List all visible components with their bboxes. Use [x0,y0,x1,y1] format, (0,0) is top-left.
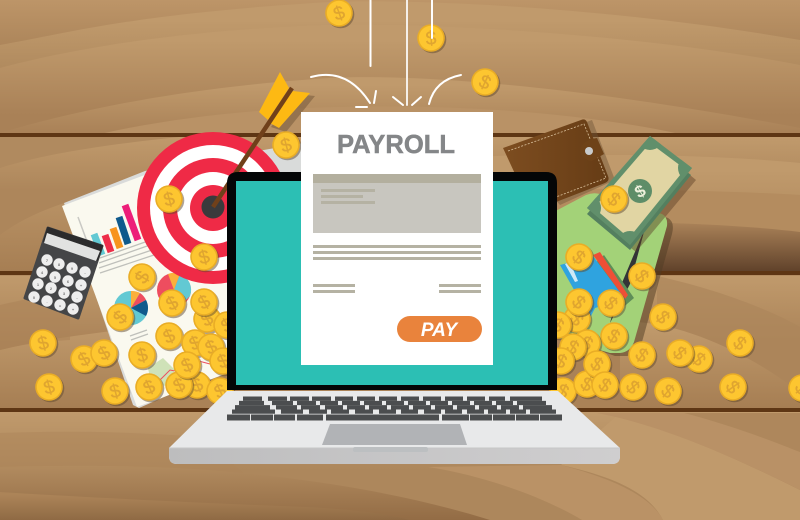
laptop base [169,391,620,464]
coin pile: right: $ [721,377,744,398]
pay button: PAY [421,320,459,341]
coin pile: left: $ [211,380,230,404]
calculator keys: - [84,270,86,275]
coin pile: right: $ [548,314,568,338]
coins on target: $ [161,188,177,211]
calculator keys: = [59,303,62,308]
coin pile: left: $ [218,314,238,338]
front notch [353,447,428,452]
coin pile: left: $ [107,380,123,403]
coin pile: left: $ [188,374,207,398]
coin pile: right: $ [668,343,691,365]
coin pile: left: $ [170,374,189,398]
calculator keys: - [76,295,78,300]
calculator keys: + [72,307,75,312]
coin pile: right: $ [553,380,572,404]
pay button [397,316,482,342]
calculator keys: 3 [63,291,66,296]
screen [236,181,548,385]
line chart [148,358,210,386]
heading: PAYROLL [337,129,455,159]
calculator keys: + [80,283,83,288]
coin pile: right: $ [568,246,589,269]
coin pile: right: $ [594,374,615,398]
calculator keys: 0 [33,295,36,300]
coin pile: right [544,185,800,406]
green pouch [548,193,673,356]
coin pile: left: $ [95,342,115,366]
pie chart 1 [114,291,148,325]
coin pile: right: $ [630,266,653,287]
coin pile: left: $ [163,292,183,316]
coin pile: right: $ [631,344,652,368]
coin pile: right: $ [621,377,644,399]
calculator display [44,233,100,261]
coin pile: right: $ [551,350,570,374]
coins on target [155,185,219,272]
bar chart [78,205,138,255]
coin pile: right: $ [651,307,674,328]
report papers [62,140,340,408]
coin pile: left: $ [140,376,159,400]
chart caption lines [99,241,154,340]
coin pile: left: $ [178,354,197,378]
calculator keys: . [46,299,48,304]
calculator keys: 1 [37,282,40,287]
credit cards [560,252,634,318]
calculator keys: 7 [46,258,49,263]
bill seal: $ [631,181,650,202]
coin pile: right: $ [565,309,588,331]
falling coin [325,0,354,28]
coin pile: left: $ [202,336,221,360]
cash bills [587,136,696,252]
coin pile: left: $ [198,308,218,332]
coin pile: right: $ [657,380,678,403]
motion lines [311,0,461,107]
calculator keys: 5 [54,275,57,280]
coin pile: left: $ [134,344,150,367]
coin pile: left: $ [195,291,215,315]
calculator [25,228,102,318]
pouch slot [610,228,645,323]
wallet clasp [580,138,604,161]
coin pile: left [29,263,242,406]
wallet [503,119,615,205]
calculator keys: 2 [50,286,53,291]
coin pile: right: $ [577,332,597,356]
calculator keys [28,254,91,315]
calculator keys: 8 [58,262,61,267]
coin pile: right: $ [729,332,750,355]
falling coin [471,68,500,97]
wallet stitching [508,124,606,197]
pie chart 2 [157,273,191,307]
falling coin: $ [331,2,348,26]
falling coin [417,24,446,53]
payroll document [301,112,493,365]
coin pile: left: $ [75,348,95,372]
coin pile: right: $ [599,293,622,315]
coin pile: left: $ [109,307,132,328]
arrow in target [213,72,315,207]
coin pile: right: $ [567,292,590,314]
coin pile: left: $ [214,350,233,374]
coin pile: right: $ [586,353,607,377]
calculator keys: 9 [71,266,74,271]
coin pile: left: $ [186,332,205,356]
falling coin: $ [425,28,438,50]
bill face [594,143,685,238]
coin pile: right: $ [563,336,583,360]
coin pile: left: $ [160,325,179,349]
target [137,132,289,284]
calculator keys: 6 [67,279,70,284]
coin pile: right: $ [604,325,624,349]
screen bezel [227,172,557,390]
coin pile: right: $ [577,373,597,397]
keyboard [227,399,562,418]
falling coin: $ [278,134,294,157]
coin pile: left: $ [35,332,51,355]
calculator keys: 4 [41,270,44,275]
document header block [313,174,481,233]
trackpad [322,424,467,445]
laptop [169,172,620,464]
coins on target: $ [196,246,212,269]
coin pile: left: $ [131,267,155,287]
coin pile: right: $ [687,349,710,371]
coin pile: left: $ [41,376,57,399]
bill corner scallops [587,136,692,238]
coin pile: right: $ [603,188,624,211]
falling coin: $ [475,71,494,95]
falling coin [272,131,301,160]
document text lines [313,245,481,293]
